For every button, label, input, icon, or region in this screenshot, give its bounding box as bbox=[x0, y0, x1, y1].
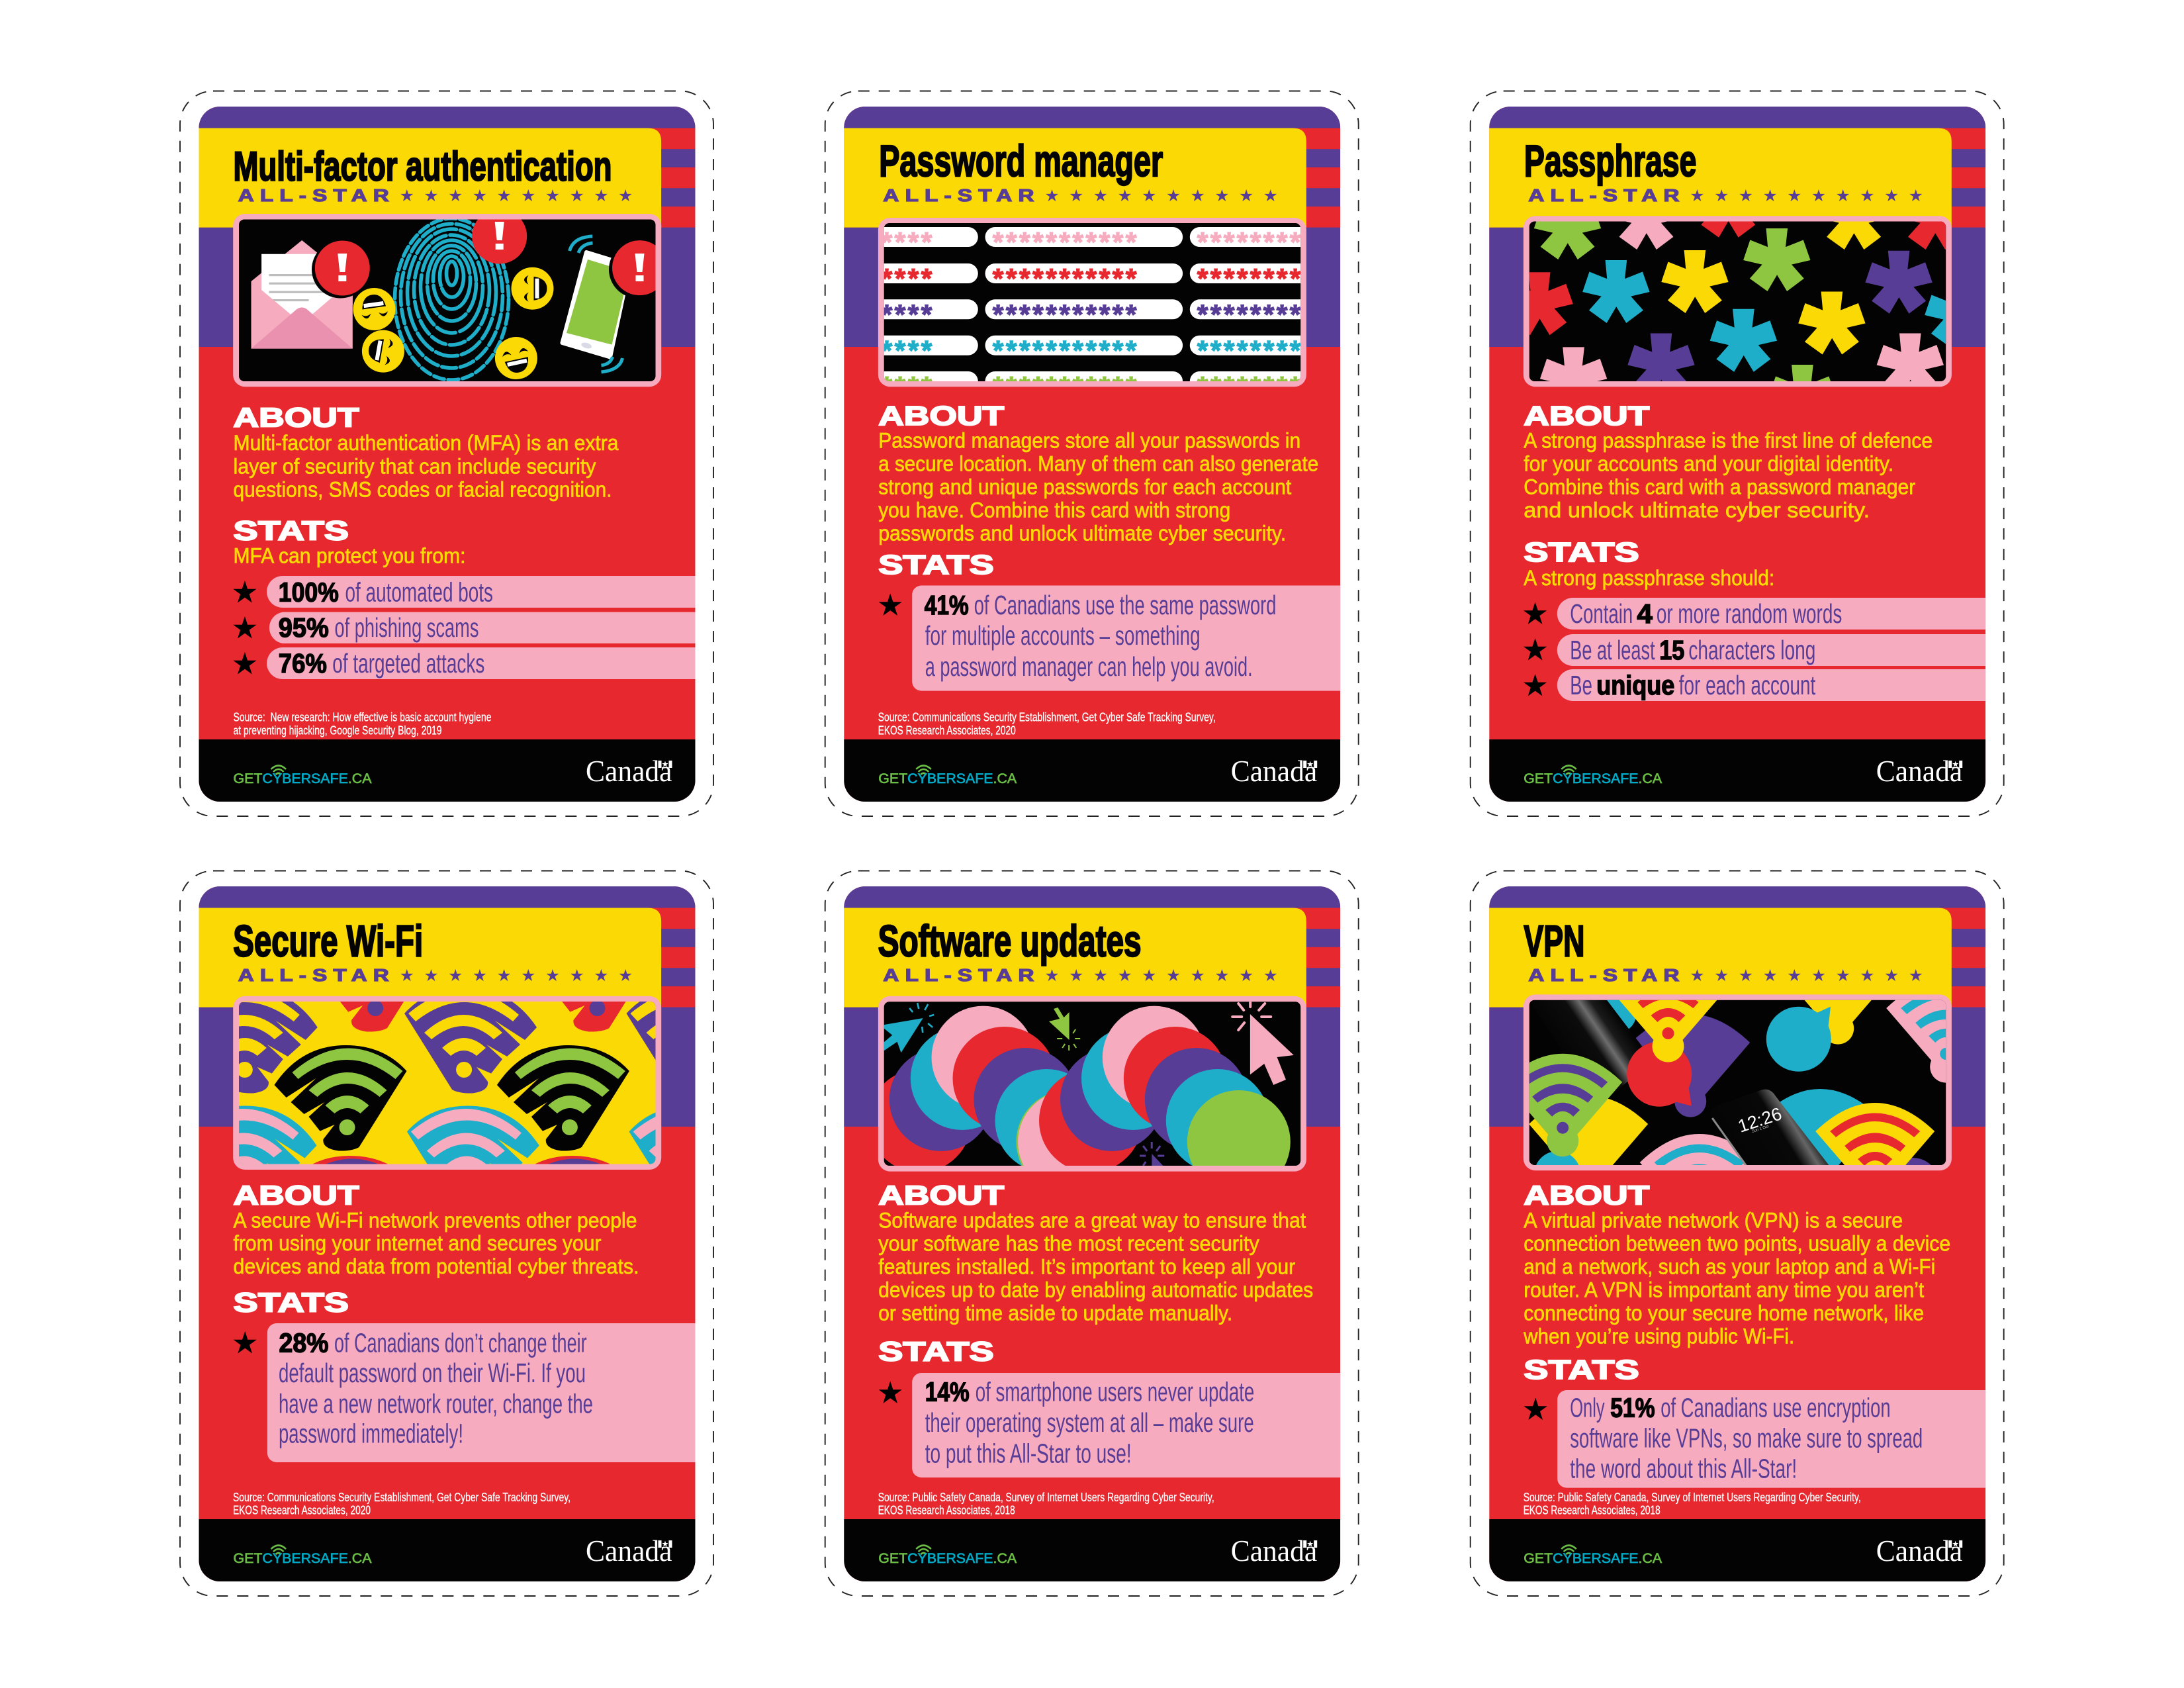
stats heading: STATS bbox=[233, 1287, 349, 1317]
all-star tagline: ALL-STAR bbox=[883, 966, 1034, 985]
source: Source: Public Safety Canada, Survey of Internet Users Regarding Cyber Security, bbox=[1524, 1491, 1861, 1504]
stat: 14%: 14% bbox=[925, 1377, 970, 1407]
card background bands bbox=[844, 886, 1340, 1581]
source bbox=[878, 1491, 1214, 1517]
asterisk rows bbox=[868, 232, 1301, 388]
stat 3: 76%: of targeted attacks bbox=[332, 648, 484, 679]
source bbox=[233, 711, 491, 737]
footer logos: GETCYBERSAFE.CA bbox=[233, 1551, 372, 1566]
icon: emoji faces bbox=[350, 267, 553, 383]
source: EKOS Research Associates, 2020 bbox=[233, 1504, 371, 1517]
speech bubble: teal bbox=[1766, 1007, 1831, 1072]
about heading: ABOUT bbox=[1524, 1180, 1649, 1211]
photo: lower phone with clock bbox=[1711, 1090, 1833, 1171]
icon: envelope bbox=[251, 240, 353, 349]
black and green wi-fi symbols bbox=[274, 1045, 629, 1151]
cut line bbox=[825, 871, 1359, 1596]
about heading: ABOUT bbox=[233, 402, 359, 433]
about text: strong and unique passwords for each account bbox=[878, 475, 1291, 499]
footer logos bbox=[1524, 1534, 1962, 1568]
stat 2: fifteen characters: Be at least bbox=[1570, 635, 1655, 665]
about text: features installed. It’s important to keep all your bbox=[878, 1255, 1296, 1279]
stat 1: 100% bbox=[233, 576, 695, 608]
footer logos: GETCYBERSAFE.CA bbox=[1524, 771, 1662, 786]
about text: a secure location. Many of them can also generate bbox=[878, 452, 1318, 476]
all-star tagline bbox=[883, 187, 1277, 205]
illustration: coloured asterisks bbox=[1529, 221, 1946, 381]
stats intro: A strong passphrase should: bbox=[1524, 566, 1774, 590]
about text: Combine this card with a password manager bbox=[1524, 475, 1916, 499]
about text: questions, SMS codes or facial recognition. bbox=[233, 477, 612, 501]
title: Secure Wi-Fi bbox=[233, 916, 423, 966]
wi-fi: yellow and red, top bbox=[1608, 959, 1727, 1062]
stat 3: unique bbox=[1524, 669, 1985, 701]
footer logos: Canada bbox=[1876, 755, 1962, 788]
card background bands bbox=[1489, 107, 1985, 802]
all-star tagline: ALL-STAR bbox=[883, 187, 1034, 205]
footer logos: GETCYBERSAFE.CA bbox=[1524, 1551, 1662, 1566]
footer logos: Canada bbox=[586, 755, 672, 788]
stats heading: STATS bbox=[1524, 537, 1639, 567]
stat: 41%: 41% bbox=[925, 590, 969, 620]
about text: devices up to date by enabling automatic updates bbox=[878, 1278, 1313, 1301]
stat: 41%: for multiple accounts – something bbox=[925, 620, 1201, 651]
stats heading: STATS bbox=[1524, 1354, 1639, 1385]
stat 2: fifteen characters: 15 bbox=[1659, 635, 1684, 665]
all-star tagline: ALL-STAR bbox=[238, 187, 389, 205]
source bbox=[1524, 1491, 1861, 1517]
title: VPN bbox=[1524, 916, 1584, 966]
source: Source: Communications Security Establishment, Get Cyber Safe Tracking Survey, bbox=[233, 1491, 570, 1504]
wi-fi: pink and teal, top right bbox=[1886, 980, 2005, 1083]
stat: 51%: of Canadians use encryption bbox=[1661, 1393, 1891, 1423]
stat 3: unique: Be bbox=[1570, 670, 1592, 700]
source bbox=[233, 1491, 570, 1517]
image frame bbox=[878, 996, 1306, 1172]
about text: router. A VPN is important any time you aren’t bbox=[1524, 1278, 1924, 1301]
about text: Software updates are a great way to ensure that bbox=[878, 1209, 1306, 1233]
about text bbox=[1524, 429, 1933, 522]
purple wi-fi symbols bbox=[239, 1002, 655, 1094]
title: Passphrase bbox=[1524, 136, 1696, 186]
about text: layer of security that can include security bbox=[233, 454, 596, 478]
source: Source: Communications Security Establishment, Get Cyber Safe Tracking Survey, bbox=[878, 711, 1216, 724]
stat 1: four words: 4 bbox=[1637, 598, 1653, 629]
solid background fans bbox=[1529, 941, 1939, 1211]
about heading: ABOUT bbox=[878, 1180, 1004, 1211]
stat: 28%: password immediately! bbox=[279, 1419, 463, 1449]
stat: 28%: have a new network router, change the bbox=[279, 1388, 593, 1419]
stats heading: STATS bbox=[233, 515, 349, 545]
about text: connection between two points, usually a device bbox=[1524, 1232, 1950, 1256]
source: EKOS Research Associates, 2018 bbox=[1524, 1504, 1661, 1517]
about heading: ABOUT bbox=[878, 400, 1004, 431]
footer logos: GETCYBERSAFE.CA bbox=[878, 771, 1017, 786]
about heading: ABOUT bbox=[233, 1180, 359, 1211]
all-star tagline: ALL-STAR bbox=[238, 966, 389, 985]
about text: when you’re using public Wi-Fi. bbox=[1523, 1324, 1794, 1348]
stat 1: four words: or more random words bbox=[1657, 598, 1842, 629]
wi-fi: yellow and red, bottom right bbox=[1815, 1103, 1934, 1206]
title: Software updates bbox=[878, 916, 1142, 966]
illustration: envelope, fingerprint, phone bbox=[238, 209, 667, 383]
source bbox=[878, 711, 1216, 737]
about text: A secure Wi-Fi network prevents other people bbox=[233, 1208, 637, 1232]
illustration: wi-fi pattern bbox=[239, 1002, 655, 1164]
stat: 51%: software like VPNs, so make sure to spread bbox=[1570, 1423, 1923, 1454]
all-star tagline bbox=[1528, 187, 1922, 205]
about text: connecting to your secure home network, like bbox=[1524, 1301, 1924, 1325]
illustration: phones, bubbles, wi-fi bbox=[1503, 941, 2005, 1237]
card 6: VPN bbox=[1471, 871, 2005, 1596]
footer logos bbox=[1524, 755, 1962, 788]
stat: 28%: of Canadians don’t change their bbox=[334, 1327, 587, 1358]
speech bubble: red bbox=[1627, 1042, 1692, 1107]
cut line bbox=[180, 871, 713, 1596]
icon: phone bbox=[563, 236, 630, 372]
stats heading: STATS bbox=[878, 549, 994, 580]
card background bands bbox=[199, 886, 695, 1581]
card 2: password manager bbox=[825, 91, 1359, 816]
all-star tagline bbox=[238, 966, 632, 985]
stat: 41%: a password manager can help you avoid. bbox=[925, 651, 1253, 682]
stats heading: STATS bbox=[878, 1336, 994, 1366]
source: EKOS Research Associates, 2018 bbox=[878, 1504, 1015, 1517]
card 4: secure wi-fi bbox=[180, 871, 761, 1596]
footer logos: GETCYBERSAFE.CA bbox=[233, 771, 372, 786]
stat 3: 76%: 76% bbox=[279, 648, 327, 679]
all-star tagline bbox=[238, 187, 632, 205]
photo: upper phone bbox=[1529, 1000, 1643, 1096]
image frame bbox=[878, 218, 1306, 387]
image frame bbox=[1524, 216, 1952, 387]
icon: fingerprint bbox=[394, 218, 508, 380]
source: Source: New research: How effective is basic account hygiene bbox=[233, 711, 491, 724]
footer logos bbox=[878, 1534, 1317, 1568]
stat: 28%: 28% bbox=[279, 1327, 328, 1358]
about text bbox=[233, 1208, 639, 1278]
wi-fi: green and purple bbox=[1503, 1054, 1622, 1156]
stat 2: 95%: of phishing scams bbox=[335, 612, 479, 643]
about text: or setting time aside to update manually. bbox=[878, 1301, 1232, 1325]
illustration: password rows bbox=[884, 223, 1301, 381]
icon: pink cursor bbox=[1232, 1002, 1294, 1085]
footer logos: Canada bbox=[586, 1534, 672, 1568]
about text: and a network, such as your laptop and a Wi-Fi bbox=[1524, 1255, 1935, 1279]
password field pills bbox=[884, 227, 1301, 381]
stat 1: four words: Contain bbox=[1570, 598, 1633, 629]
red wi-fi symbols bbox=[278, 926, 657, 1262]
stat 2: fifteen characters: characters long bbox=[1688, 635, 1815, 665]
stat: 28% bbox=[234, 1323, 695, 1462]
source: EKOS Research Associates, 2020 bbox=[878, 724, 1016, 737]
stat 1: 100%: 100% bbox=[279, 577, 339, 608]
footer logos: GETCYBERSAFE.CA bbox=[878, 1551, 1017, 1566]
stat: 51% bbox=[1524, 1390, 1985, 1488]
about text: Password managers store all your passwords in bbox=[878, 429, 1300, 453]
icon: green cursor bbox=[1049, 1008, 1080, 1051]
about text: and unlock ultimate cyber security. bbox=[1524, 498, 1870, 522]
image frame bbox=[233, 214, 661, 387]
footer logos bbox=[878, 755, 1317, 788]
footer logos: Canada bbox=[1231, 1534, 1317, 1568]
title: Multi-factor authentication bbox=[233, 143, 612, 189]
cut line bbox=[825, 91, 1359, 816]
stat 2: 95% bbox=[233, 612, 695, 643]
icon: teal cursor bbox=[880, 1003, 934, 1053]
stat: 51%: Only bbox=[1570, 1393, 1605, 1423]
stat: 14% bbox=[879, 1373, 1340, 1477]
about text bbox=[878, 429, 1318, 545]
about text: Multi-factor authentication (MFA) is an extra bbox=[233, 431, 619, 455]
stat: 41% bbox=[879, 585, 1340, 691]
source: Source: Public Safety Canada, Survey of Internet Users Regarding Cyber Security, bbox=[878, 1491, 1214, 1504]
all-star tagline bbox=[1528, 966, 1922, 985]
about text: devices and data from potential cyber threats. bbox=[233, 1254, 639, 1278]
all-star tagline bbox=[883, 966, 1277, 985]
teal and pink wi-fi symbols bbox=[239, 1105, 655, 1164]
stat 1: 100%: of automated bots bbox=[345, 577, 493, 608]
all-star tagline: ALL-STAR bbox=[1528, 187, 1679, 205]
footer logos bbox=[233, 755, 672, 788]
about text: passwords and unlock ultimate cyber security. bbox=[878, 521, 1286, 545]
about text: for your accounts and your digital identity. bbox=[1524, 452, 1893, 476]
photo: lower phone with clock: 12:26 bbox=[1735, 1103, 1784, 1137]
about text: your software has the most recent security bbox=[878, 1232, 1259, 1256]
footer logos: Canada bbox=[1876, 1534, 1962, 1568]
about text bbox=[878, 1209, 1313, 1325]
stat: 41%: of Canadians use the same password bbox=[974, 590, 1276, 620]
card 3: passphrase bbox=[1471, 91, 2004, 816]
about text: from using your internet and secures your bbox=[233, 1231, 602, 1255]
stat: 14%: to put this All-Star to use! bbox=[925, 1438, 1132, 1468]
cut line bbox=[1471, 91, 2004, 816]
image frame bbox=[233, 996, 661, 1170]
card background bands bbox=[844, 107, 1340, 802]
icon: purple cursor bbox=[1140, 1142, 1164, 1167]
stat 2: fifteen characters bbox=[1524, 634, 1985, 666]
card background bands bbox=[199, 107, 695, 802]
about text: A strong passphrase is the first line of defence bbox=[1524, 429, 1933, 453]
illustration: circles and cursors bbox=[868, 1002, 1301, 1194]
footer logos bbox=[233, 1534, 672, 1568]
card 5: software updates bbox=[825, 871, 1359, 1596]
stat: 28%: default password on their Wi-Fi. If you bbox=[279, 1358, 586, 1388]
all-star tagline: ALL-STAR bbox=[1528, 966, 1679, 985]
stat 2: 95%: 95% bbox=[279, 612, 329, 643]
wi-fi: pink and teal, lower middle bbox=[1640, 1134, 1759, 1237]
footer logos: Canada bbox=[1231, 755, 1317, 788]
stats intro: MFA can protect you from: bbox=[233, 544, 466, 568]
stat 3: unique: for each account bbox=[1679, 670, 1816, 700]
stat 3: 76% bbox=[233, 647, 695, 679]
stat: 51%: 51% bbox=[1610, 1393, 1655, 1423]
overlapping circles bbox=[868, 1006, 1291, 1194]
stat: 14%: their operating system at all – make sure bbox=[925, 1407, 1254, 1438]
about text: A virtual private network (VPN) is a secure bbox=[1524, 1209, 1903, 1233]
photo: lower phone with clock: Sun 1 Oct bbox=[1751, 1125, 1770, 1134]
source: at preventing hijacking, Google Security Blog, 2019 bbox=[233, 724, 442, 737]
title: Password manager bbox=[879, 136, 1163, 186]
about text: you have. Combine this card with strong bbox=[878, 498, 1230, 522]
image frame bbox=[1524, 994, 1952, 1170]
stat 3: unique: unique bbox=[1596, 670, 1674, 700]
stat: 51%: the word about this All-Star! bbox=[1570, 1454, 1797, 1484]
cut line bbox=[180, 91, 713, 816]
stat 1: four words bbox=[1524, 598, 1985, 630]
about heading: ABOUT bbox=[1524, 400, 1649, 431]
cut line bbox=[1471, 871, 2004, 1596]
icon: alert badges bbox=[312, 220, 655, 298]
card background bands bbox=[1489, 886, 1985, 1581]
about text bbox=[233, 431, 619, 501]
about text bbox=[1523, 1209, 1950, 1348]
card 1: multi-factor authentication bbox=[180, 91, 713, 816]
stat: 14%: of smartphone users never update bbox=[976, 1377, 1254, 1407]
